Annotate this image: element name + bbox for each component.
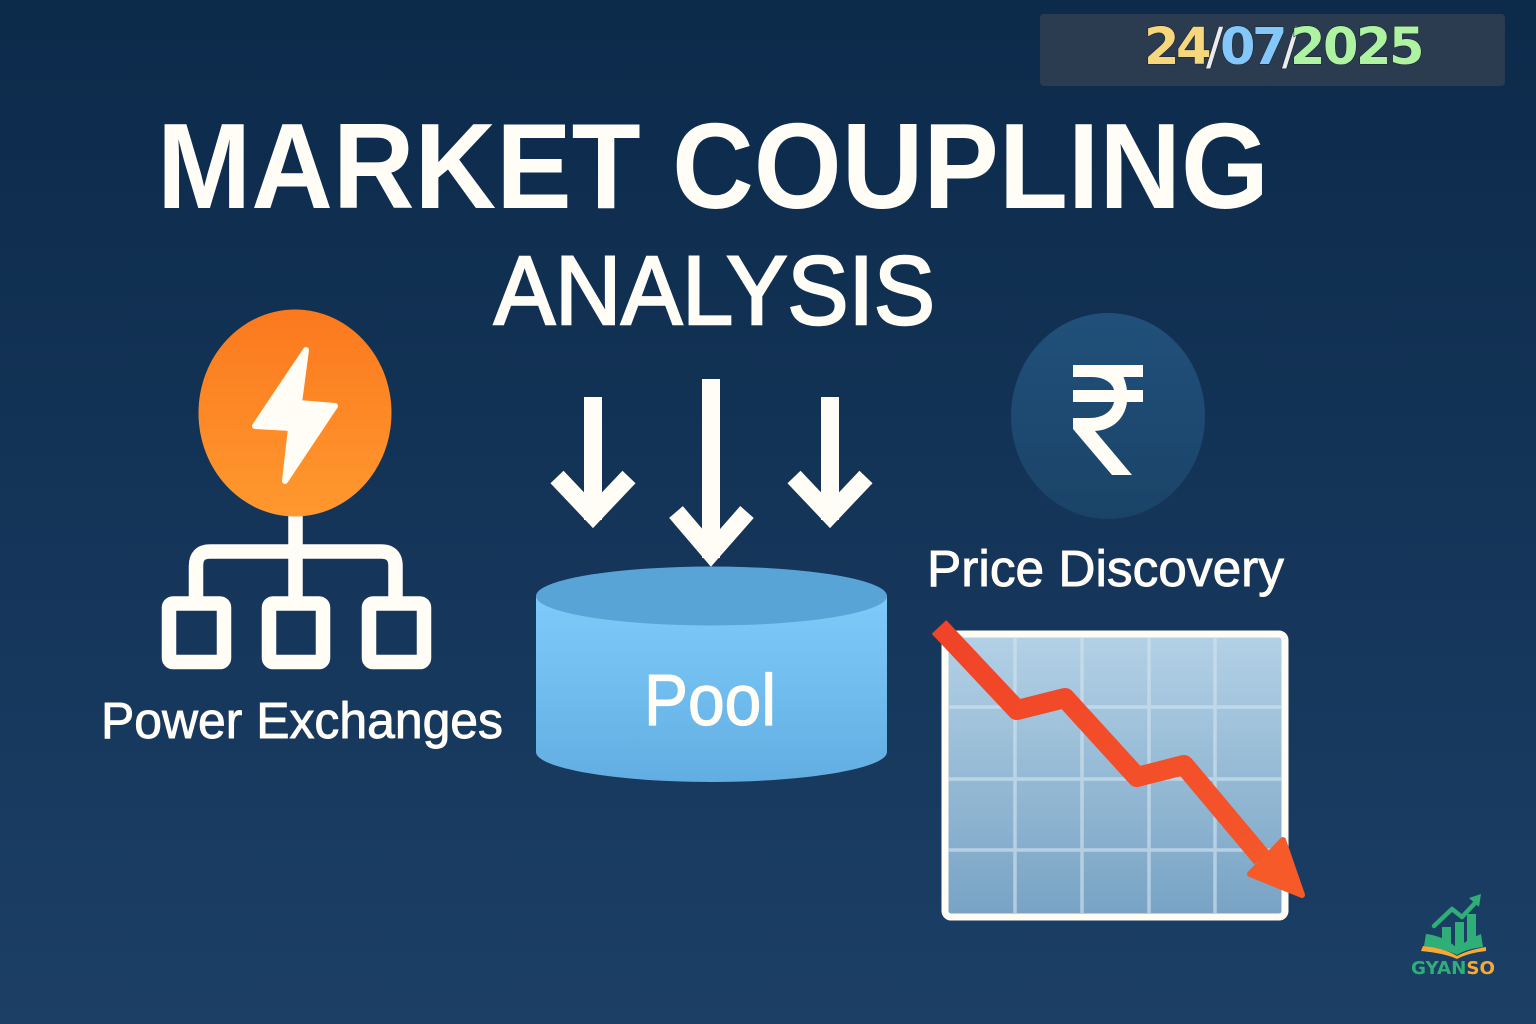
logo growth arrow [1434,902,1476,926]
arrow: middle [676,379,747,558]
arrows into pool [557,379,866,558]
date badge: 24 [1144,18,1212,77]
icon: lightning bolt [255,350,335,481]
network connector tree [169,510,424,662]
icon: power exchanges network [169,310,424,662]
date badge: 2025 [1290,18,1424,77]
pool cylinder [536,566,887,782]
logo: gyanso [1411,894,1495,979]
label: power exchanges: Power Exchanges [101,692,503,749]
orange circle [198,310,392,516]
logo book [1424,934,1483,955]
rupee symbol [1073,365,1143,475]
falling price chart [939,627,1302,917]
chart frame [945,634,1285,917]
grid [948,638,1282,913]
falling red arrow [939,627,1302,895]
logo bars [1442,914,1476,948]
date badge [1040,14,1505,86]
arrow: left [557,397,629,520]
date badge: / [1282,18,1300,77]
label: pool: Pool [644,661,776,741]
logo wordmark: GYANSO [1411,958,1495,979]
label: price discovery: Price Discovery [927,540,1284,597]
date badge: 07 [1220,18,1288,77]
title: MARKET COUPLING [157,98,1269,234]
subtitle: ANALYSIS [494,236,935,345]
arrow: right [794,397,866,520]
icon: rupee coin [1011,313,1205,519]
date badge: / [1206,18,1224,77]
